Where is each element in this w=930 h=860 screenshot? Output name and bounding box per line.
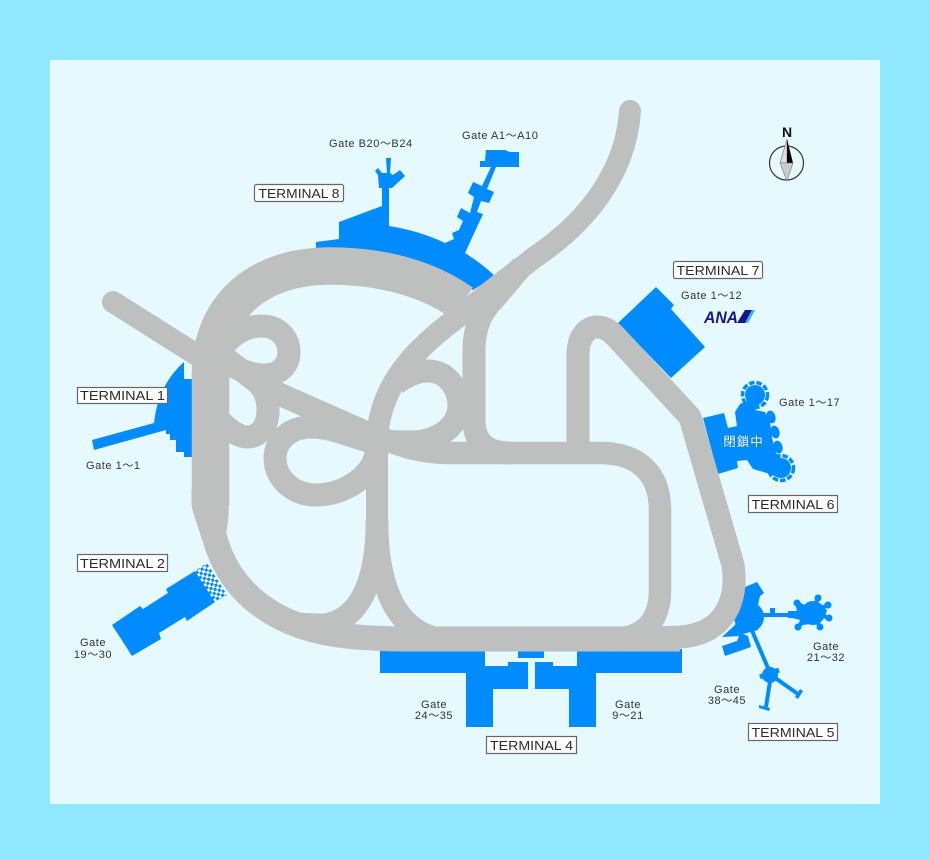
closed notice: 閉鎖中 <box>723 434 764 449</box>
airline logo: ANA: ANA <box>703 308 738 327</box>
compass: N <box>782 124 792 140</box>
label: terminal 1: TERMINAL 1 <box>80 388 165 403</box>
label: terminal 4: TERMINAL 4 <box>490 738 573 753</box>
label: terminal 2: TERMINAL 2 <box>80 556 165 571</box>
terminal 8 building <box>316 150 519 290</box>
gate label: terminal 4 west: Gate <box>421 699 447 711</box>
gate label: terminal 2: Gate <box>80 637 106 649</box>
gate label: terminal 2: 19～30 <box>74 649 112 661</box>
taxiway network <box>113 111 734 639</box>
gate label: terminal 6: Gate 1～17 <box>779 397 840 409</box>
gate label: terminal 8 B: Gate B20～B24 <box>329 138 413 150</box>
label: terminal 5: TERMINAL 5 <box>752 725 834 740</box>
map panel <box>50 60 880 804</box>
gate label: terminal 4 east: 9～21 <box>612 710 644 722</box>
compass <box>770 124 804 181</box>
label: terminal 6: TERMINAL 6 <box>752 497 834 512</box>
gate label: terminal 8 A: Gate A1～A10 <box>462 130 538 142</box>
gate label: terminal 7: Gate 1～12 <box>681 290 742 302</box>
terminal 1 building <box>92 362 196 457</box>
gate label: terminal 5 east: Gate <box>813 641 839 653</box>
label: terminal 8: TERMINAL 8 <box>258 186 340 201</box>
gate label: terminal 5 south: 38～45 <box>708 695 746 707</box>
terminal 5 building <box>722 582 832 711</box>
gate label: terminal 4 east: Gate <box>615 699 641 711</box>
label: terminal 7: TERMINAL 7 <box>676 263 760 278</box>
terminal 4 building <box>380 647 682 727</box>
terminal 6 building <box>703 382 794 480</box>
terminal 2 building <box>112 563 227 656</box>
gate label: terminal 5 south: Gate <box>714 684 740 696</box>
gate label: terminal 4 west: 24～35 <box>415 710 453 722</box>
gate label: terminal 1: Gate 1～1 <box>86 460 141 472</box>
terminal 7 building <box>618 287 705 378</box>
gate label: terminal 5 east: 21～32 <box>807 652 845 664</box>
